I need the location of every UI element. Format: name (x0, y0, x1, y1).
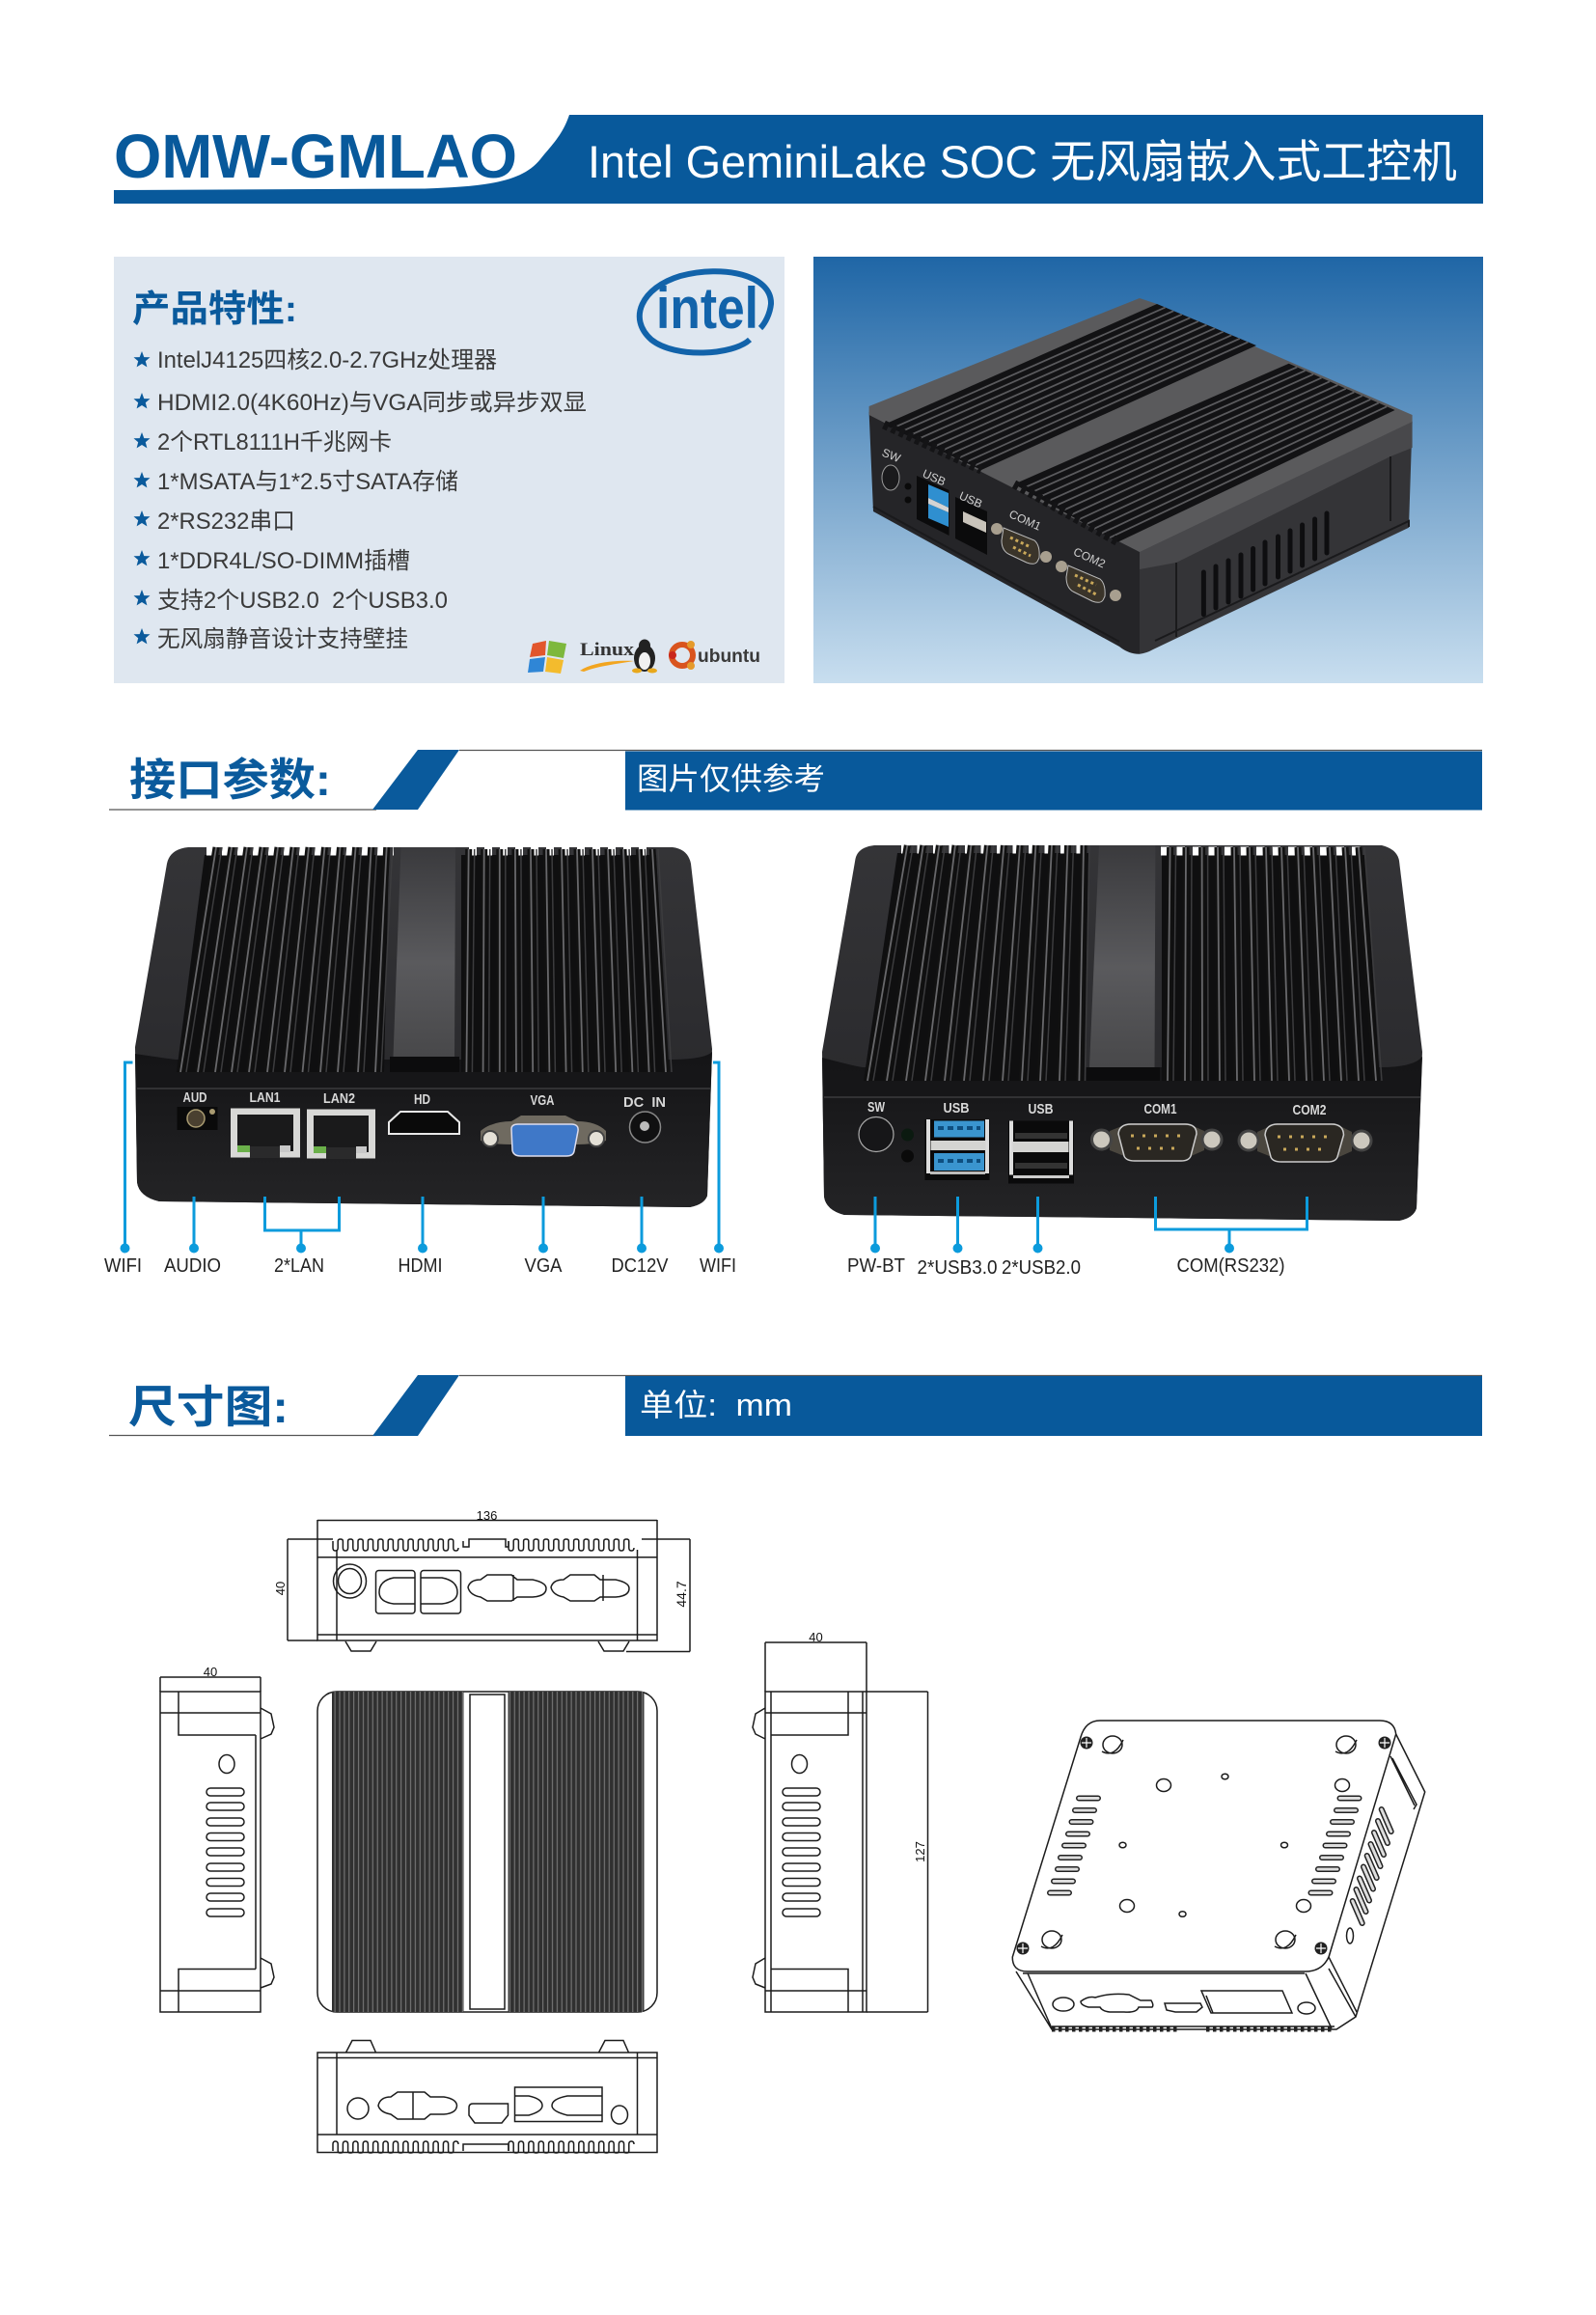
dimension: height 40: 40 (273, 1582, 288, 1595)
right device callouts: 2*USB3.0 (917, 1257, 998, 1279)
unit bar (625, 1376, 1482, 1436)
feature list: 2个RTL8111H千兆网卡 (157, 429, 392, 455)
centre band (394, 847, 455, 1057)
port labels: SW (867, 1099, 886, 1116)
feature list: 1*DDR4L/SO-DIMM插槽 (157, 548, 410, 574)
port labels: USB (1029, 1101, 1054, 1117)
ports on left face: SW (880, 446, 903, 465)
USB2.0 ports (1008, 1121, 1074, 1183)
note text: 图片仅供参考 (637, 761, 825, 796)
feature list: 1*MSATA与1*2.5寸SATA存储 (157, 469, 458, 495)
front ports (347, 2087, 627, 2124)
feature list: 2*RS232串口 (157, 509, 295, 535)
intel logo (640, 271, 771, 353)
drawing: right side view (753, 1630, 928, 2012)
fin group right (461, 855, 668, 1072)
top fin groups (884, 304, 1256, 470)
ports on left face: COM2 (1071, 545, 1108, 571)
banner title: Intel GeminiLake SOC 无风扇嵌入式工控机 (588, 136, 1457, 187)
left device: rear ports (135, 847, 712, 1207)
drawing: top view (317, 1692, 657, 2012)
port labels: COM2 (1293, 1102, 1326, 1118)
section heading: interface parameters (109, 750, 1482, 811)
side vents (1203, 513, 1327, 615)
panel: product features (114, 257, 784, 683)
port labels: LAN1 (249, 1089, 280, 1106)
panel: product photo (813, 257, 1483, 683)
device: right face (1140, 422, 1413, 654)
port labels: VGA (531, 1092, 555, 1109)
model name: OMW-GMLAO (114, 122, 517, 191)
ports on left face: USB (957, 489, 984, 510)
left device callouts (104, 1062, 736, 1277)
dimension: height 40 (273, 1539, 317, 1640)
HDMI port (389, 1112, 459, 1134)
right device callouts (847, 1197, 1307, 1279)
section note bar (625, 751, 1482, 811)
dimension: 40: 40 (809, 1630, 823, 1644)
section title: 接口参数: (129, 755, 331, 805)
base plate (1012, 1721, 1396, 1971)
bottom vent slots (1050, 1799, 1359, 1893)
COM ports (1092, 1123, 1371, 1162)
rear feet (345, 1641, 629, 1651)
centre strip (470, 1695, 505, 2009)
VGA port (481, 1116, 606, 1156)
corner screws (1017, 1737, 1391, 1955)
feature list (133, 347, 587, 652)
fin group right (1162, 855, 1380, 1081)
port labels: LAN2 (323, 1090, 355, 1107)
icon: linux (580, 639, 657, 674)
banner blue band (114, 115, 1483, 204)
fin group left (864, 853, 1088, 1081)
port labels: COM1 (1144, 1101, 1177, 1117)
port labels: USB (944, 1100, 970, 1116)
feature list: 支持2个USB2.0 2个USB3.0 (157, 588, 448, 614)
section title: 尺寸图: (128, 1382, 289, 1432)
drawing: left side view (160, 1665, 274, 2012)
dimension: height 44.7: 44.7 (674, 1581, 689, 1608)
dimension: 127 (867, 1692, 928, 2012)
heatsink fins (332, 1692, 463, 2012)
port labels (183, 1089, 666, 1111)
white notches between fin tips (901, 849, 1362, 851)
dimension: 40: 40 (204, 1665, 217, 1679)
seam lines (873, 456, 1409, 642)
port labels: DC IN (623, 1094, 666, 1111)
ports on left face (880, 446, 1121, 602)
port labels: HD (414, 1091, 430, 1108)
port labels (867, 1099, 1326, 1118)
left device callouts: HDMI (398, 1255, 442, 1277)
DC jack (629, 1112, 660, 1143)
power button and LEDs (859, 1117, 914, 1162)
right device: front ports (822, 845, 1422, 1221)
feature list: IntelJ4125四核2.0-2.7GHz处理器 (157, 347, 497, 373)
centre band (1089, 845, 1155, 1067)
left device callouts: WIFI (700, 1255, 736, 1277)
device body (135, 847, 712, 1207)
front panel ports (1053, 1991, 1315, 2014)
icon: ubuntu (669, 641, 760, 670)
dimension: 127: 127 (913, 1841, 927, 1862)
feature list: 无风扇静音设计支持壁挂 (157, 626, 408, 652)
dimension: 40 (765, 1630, 867, 1692)
bottom comb edge (1052, 2026, 1335, 2032)
dimension: width 136 (317, 1508, 657, 1539)
white notches between fin tips (206, 847, 654, 855)
ports on left face: COM1 (1007, 508, 1043, 534)
vent slots (783, 1788, 820, 1916)
intel logo: intel (656, 276, 758, 341)
header banner (114, 115, 1483, 204)
dimension: height 44.7 (626, 1539, 690, 1652)
icon: ubuntu: ubuntu (698, 647, 760, 667)
section heading: dimensions (109, 1375, 1482, 1436)
left device callouts: DC12V (612, 1255, 669, 1277)
right device callouts: PW-BT (847, 1255, 905, 1277)
USB3.0 ports (924, 1119, 990, 1180)
right device callouts: 2*USB2.0 (1002, 1257, 1081, 1279)
left device callouts: WIFI (104, 1255, 142, 1277)
device: top plate (869, 298, 1413, 552)
fin group left (177, 855, 389, 1072)
side and front outlines (1016, 1734, 1425, 2029)
feature list: HDMI2.0(4K60Hz)与VGA同步或异步双显 (157, 390, 587, 416)
device body (822, 845, 1422, 1221)
left device callouts: AUDIO (164, 1255, 221, 1277)
LAN ports (231, 1108, 375, 1159)
parallelogram accent (372, 1375, 459, 1436)
parallelogram accent (372, 750, 459, 810)
rubber feet (1041, 1736, 1357, 1948)
unit text: 单位: mm (640, 1388, 792, 1422)
port labels: AUD (183, 1089, 207, 1106)
left device callouts: 2*LAN (274, 1255, 324, 1277)
dimension: width 136: 136 (477, 1508, 497, 1523)
icon: linux: Linux (580, 640, 635, 660)
features heading: 产品特性: (132, 289, 297, 330)
drawing: front view (317, 2040, 657, 2153)
drawing: isometric bottom view (1012, 1721, 1425, 2029)
audio jack (178, 1107, 218, 1130)
vent slots (206, 1788, 244, 1916)
device: left face (869, 412, 1140, 654)
drawing: rear view (273, 1508, 690, 1652)
dimension: 40 (160, 1665, 261, 1692)
ports on left face: USB (921, 467, 948, 488)
left device callouts: VGA (525, 1255, 563, 1277)
icon: windows flag (528, 641, 566, 674)
device: top lip (1140, 422, 1413, 569)
side vents (1353, 1809, 1391, 1923)
rear ports (334, 1564, 629, 1613)
fin teeth over front edge (884, 425, 1117, 542)
right device callouts: COM(RS232) (1177, 1255, 1285, 1277)
